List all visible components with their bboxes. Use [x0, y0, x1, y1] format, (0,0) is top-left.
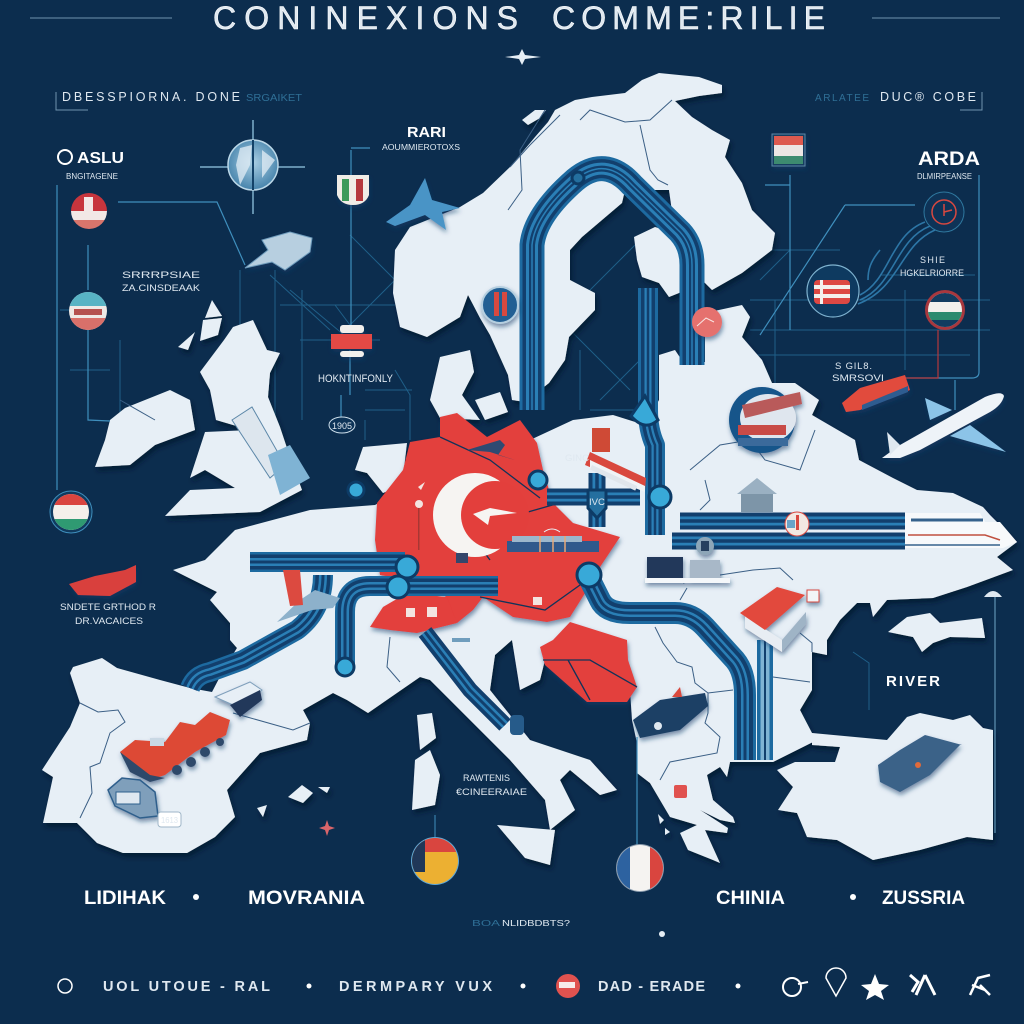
transport corridors [190, 169, 905, 760]
red highlighted territories [370, 413, 637, 702]
corridor: northern arch [532, 169, 692, 410]
icon: grey plane [245, 232, 312, 270]
land: Scandinavia [393, 73, 775, 402]
icon: airplane [882, 393, 1006, 458]
flag: Hungary pin right [905, 290, 965, 378]
wavy flow lines [858, 222, 935, 304]
land: Scottish isles [178, 300, 222, 350]
land: Ireland [95, 390, 195, 467]
icon: blue jet [386, 178, 460, 230]
icon: grey machine France [215, 682, 262, 717]
land: Denmark [430, 350, 480, 420]
label: ARDA: ARDA [918, 149, 980, 170]
icon: small star [319, 820, 335, 836]
flag: red and white circular badge [807, 265, 859, 317]
icon: red cargo train [120, 712, 230, 782]
label: ARDA [917, 149, 980, 181]
header left: SRGAIKET [246, 93, 302, 104]
label: SHIE [900, 255, 964, 278]
icon: red ball marker [692, 307, 722, 337]
label: ASLU [58, 150, 124, 181]
icon: red train [842, 375, 910, 412]
icon: red pavilion [585, 428, 646, 492]
country labels: MOVRANIA [248, 888, 365, 909]
red: south-west territory [370, 593, 457, 633]
icon: pin east [984, 591, 1002, 833]
header right: DUC® COBE [880, 90, 976, 104]
red: Balkan territory [540, 622, 637, 702]
label: HOKNTINFONLY: HOKNTINFONLY [318, 373, 394, 385]
header left: DBESSPIORNA. DONE [62, 90, 240, 104]
corridor: western [190, 562, 498, 688]
map landmasses [42, 73, 1017, 865]
footer ribbon: UOL UTOUE - RAL [103, 979, 270, 995]
label: footer caption: NLIDBDBTS? [502, 918, 570, 928]
icon: station block [645, 537, 730, 583]
icon: bridge in red area [467, 440, 515, 460]
footer ribbon [58, 968, 990, 1000]
hub nodes [336, 172, 671, 676]
land: Netherlands peninsula [355, 443, 407, 493]
land: Crimea [888, 613, 985, 652]
red crescent emblem [433, 473, 529, 557]
icon: container ship [507, 529, 599, 552]
red: main territory [375, 413, 620, 623]
label: sidebar note left [122, 270, 201, 294]
label: GINC: GINC [565, 453, 590, 463]
label: SHIE: HGKELRIORRE [900, 268, 964, 278]
icon: badge on corridor: IVC [589, 497, 606, 507]
corridor: central vertical [648, 288, 655, 535]
footer icons [783, 968, 990, 1000]
footer ribbon: DAD - ERADE [598, 979, 705, 995]
flag: red bar marker [331, 325, 372, 357]
icon: red roof warehouse [740, 587, 819, 652]
corridor: south-east branch [764, 640, 766, 760]
icon: classical building [737, 478, 777, 512]
label: SGIL: SMRSOVI [832, 373, 884, 384]
flag: tricolor rectangle top right [772, 134, 805, 166]
corridor: Italy [425, 632, 505, 725]
icon: red emblem marks [406, 482, 542, 617]
label: SGIL [832, 361, 884, 384]
icon: small pin on band [785, 512, 809, 536]
country labels: ZUSSRIA [882, 888, 965, 909]
label: RARI [382, 124, 460, 152]
icon: blue car [633, 687, 708, 738]
header left [56, 90, 302, 110]
icon: blue vehicle [108, 778, 158, 818]
connector lines [57, 148, 979, 847]
title: CONINEXIONS [213, 0, 518, 36]
icon: clock gauge [924, 192, 964, 232]
icon: small red marker Greece [674, 785, 687, 798]
footer ribbon: DERMPARY VUX [339, 979, 492, 995]
label: ASLU: BNGITAGENE [66, 172, 118, 181]
land: Sicily [497, 825, 555, 865]
icon: cruise ship [905, 513, 1017, 548]
land: Turkey [777, 713, 993, 860]
borders [80, 100, 815, 818]
flag: Hungary pin left [50, 491, 92, 533]
label: Mediterranean note: €CINEERAIAE [456, 787, 527, 797]
land: Corsica [417, 713, 436, 750]
country labels: CHINIA [716, 888, 785, 909]
land: Sardinia [412, 750, 440, 810]
label: footer caption [472, 918, 570, 928]
flag: French pin [616, 844, 664, 892]
land: Great Britain [165, 320, 302, 516]
land: Balearic islands [257, 785, 330, 817]
header right [815, 90, 982, 110]
icon: cloud plane [277, 590, 340, 622]
icon: tank Turkey [878, 735, 962, 792]
icon: compass star [505, 49, 541, 65]
icon: terminal port [729, 387, 802, 453]
badge: 1613: 1613 [161, 816, 179, 825]
label: ARDA: DLMIRPEANSE [917, 172, 972, 181]
label: Mediterranean note [456, 773, 527, 797]
country labels: LIDIHAK [84, 888, 166, 909]
badge: 1905 [329, 417, 355, 433]
label: ferry note: DR.VACAICES [75, 616, 143, 626]
label: footer caption: BOA [472, 918, 501, 928]
label: SGIL: S GIL8. [835, 361, 872, 372]
label: ASLU: ASLU [77, 150, 124, 167]
corridor: horizontal links [547, 473, 905, 541]
flag: Italian shield [337, 175, 369, 205]
flag: German pin [411, 815, 459, 885]
country labels [84, 888, 965, 909]
background circuit grid [60, 235, 990, 710]
title [30, 0, 1000, 36]
label: RIVER: RIVER [886, 673, 940, 690]
label: sidebar note left: SRRRPSIAE [122, 270, 200, 281]
badge: 1613 [158, 812, 181, 827]
label: sidebar note left: ZA.CINSDEAAK [122, 283, 201, 294]
icon: globe with compass [200, 120, 305, 214]
land: Norwegian island [522, 110, 546, 125]
icon: lens marker [482, 287, 518, 323]
icon: red detail France [283, 570, 303, 606]
flag: teal, white, red circle [69, 292, 107, 330]
label: RARI: AOUMMIEROTOXS [382, 143, 460, 152]
corridor: south-east [590, 580, 745, 760]
title: COMME:RILIE [552, 0, 825, 36]
label: ferry note: SNDETE GRTHOD R [60, 602, 157, 612]
land: eastern Europe, Balkans, Italy, France and Iberia [42, 305, 1017, 863]
label: RARI: RARI [407, 124, 446, 141]
label: Mediterranean note: RAWTENIS [463, 773, 510, 783]
icon: ferry left [69, 565, 136, 596]
label: ferry note [60, 602, 157, 626]
land: Greek islands [658, 814, 670, 835]
icon: Italy port [452, 638, 524, 735]
label: SHIE: SHIE [920, 255, 945, 265]
header right: ARLATEE [815, 93, 869, 104]
icon: UK shuttle [232, 407, 310, 495]
badge: 1905: 1905 [332, 421, 352, 431]
flag: red and white circle [71, 193, 107, 229]
land: Danish islands [475, 392, 508, 420]
